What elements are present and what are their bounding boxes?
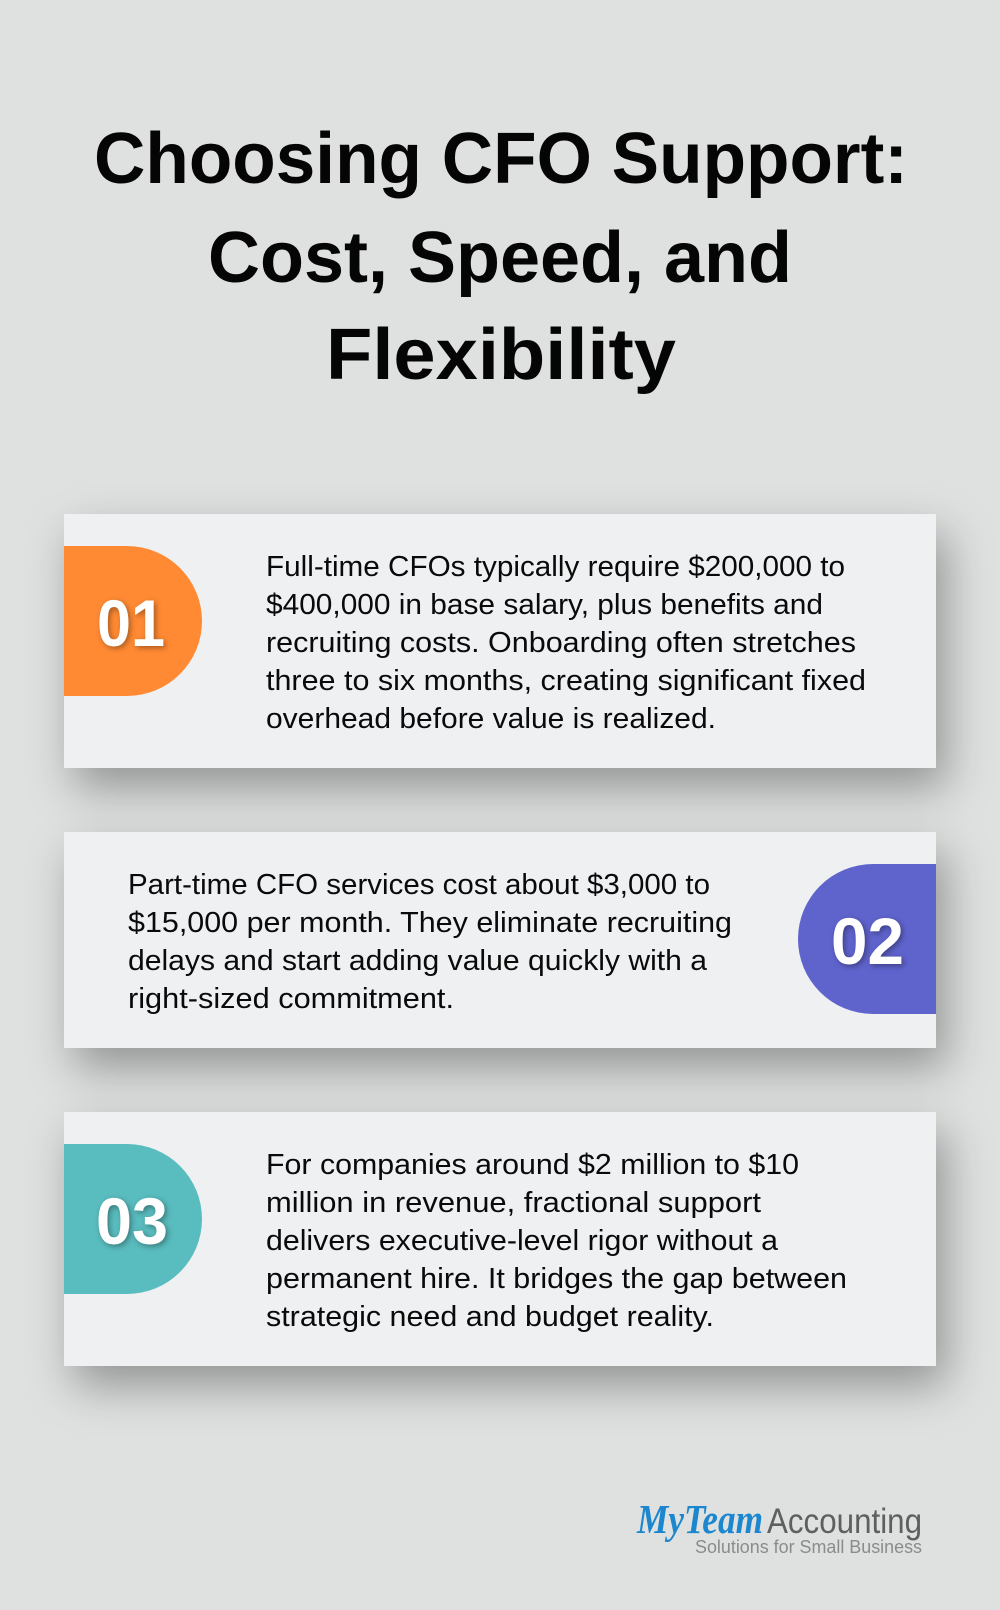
panel: full-time CFO (64, 514, 936, 768)
text: full-time CFO costs: overhead before value is realized. (266, 703, 716, 735)
text: fractional support: permanent hire. It bridges the gap between (266, 1263, 847, 1295)
text: fractional support (266, 1149, 847, 1333)
number 01: 01 (97, 586, 165, 660)
text: fractional support: delivers executive-level rigor without a (266, 1225, 779, 1257)
text: fractional support: million in revenue, fractional support (266, 1187, 761, 1219)
text: part-time CFO costs: delays and start adding value quickly with a (128, 945, 708, 977)
badge: 02 (798, 864, 936, 1014)
title: Choosing CFO Support: (94, 119, 908, 199)
badge: 01 (64, 546, 202, 696)
text: full-time CFO costs (266, 551, 866, 735)
text: part-time CFO costs (128, 869, 732, 1015)
text: part-time CFO costs: Part-time CFO services cost about $3,000 to (128, 869, 710, 901)
number 03: 03 (96, 1184, 168, 1258)
text: full-time CFO costs: Full-time CFOs typically require $200,000 to (266, 551, 845, 583)
logo: MyTeam Accounting: MyTeam (636, 1496, 763, 1542)
text: full-time CFO costs: three to six months, creating significant fixed (266, 665, 866, 697)
title (94, 119, 908, 395)
panel: part-time CFO (64, 832, 936, 1048)
logo: MyTeam Accounting (636, 1496, 922, 1557)
text: part-time CFO costs: $15,000 per month. They eliminate recruiting (128, 907, 732, 939)
logo: MyTeam Accounting: Solutions for Small Business (695, 1537, 922, 1557)
text: fractional support: strategic need and budget reality. (266, 1301, 714, 1333)
badge: 03 (64, 1144, 202, 1294)
number 02: 02 (831, 904, 904, 978)
text: full-time CFO costs: $400,000 in base salary, plus benefits and (266, 589, 823, 621)
panel: fractional support (64, 1112, 936, 1366)
logo: MyTeam Accounting: Accounting (767, 1502, 922, 1541)
text: part-time CFO costs: right-sized commitment. (128, 983, 454, 1015)
text: fractional support: For companies around $2 million to $10 (266, 1149, 799, 1181)
title: Flexibility (326, 315, 676, 395)
text: full-time CFO costs: recruiting costs. Onboarding often stretches (266, 627, 856, 659)
title: Cost, Speed, and (208, 218, 792, 298)
